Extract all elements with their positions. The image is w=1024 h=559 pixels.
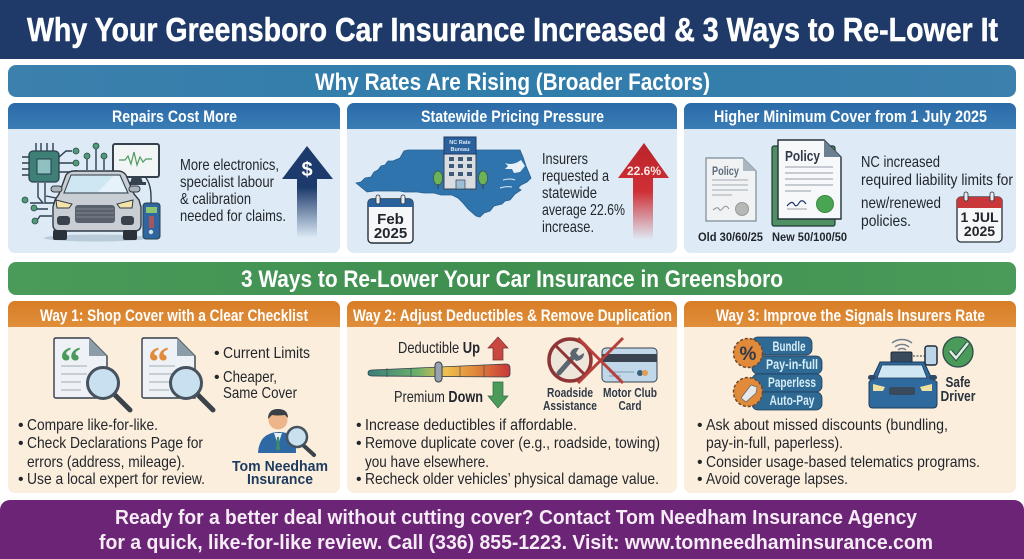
text: repairs: specialist labour: [180, 174, 275, 191]
icon: diagnostic monitor: [113, 144, 159, 185]
text: way 2 bullets: [356, 417, 660, 488]
icon: rate bureau building: Bureau: [451, 147, 469, 153]
icon: safe driver check: [943, 337, 973, 367]
text: way 2 bullets: Recheck older vehicles’ physical damage value.: [365, 471, 659, 488]
text: liability limits: [861, 154, 1014, 230]
icon: discount pills: Bundle: [772, 339, 806, 354]
icon: NC map: [356, 150, 531, 217]
icon: green down arrow: [488, 382, 508, 408]
icon: dollar up arrow: $: [301, 159, 313, 181]
panel: statewide pricing pressure: Statewide Pricing Pressure: [421, 107, 604, 126]
text: statewide: statewide: [542, 185, 597, 202]
text: way 1 bullets: Use a local expert for review.: [27, 471, 205, 488]
text: statewide: requested a: [542, 168, 609, 185]
panel: repairs cost more: Repairs Cost More: [112, 107, 237, 126]
panel: repairs cost more: [8, 103, 340, 253]
text: way 3 bullets: [697, 417, 980, 488]
text: way 1 bullets: •: [18, 471, 24, 488]
text: way 2 bullets: •: [356, 417, 362, 434]
section banner: why rates are rising: [8, 65, 1016, 97]
text: repairs: [180, 157, 286, 225]
label: new limits: New 50/100/50: [772, 230, 847, 244]
panel: statewide pricing pressure: [347, 103, 677, 253]
icon: discount pills: Auto-Pay: [770, 393, 815, 408]
text: checklist items: •: [214, 345, 220, 362]
text: way 3 bullets: •: [697, 471, 703, 488]
section banner: why rates are rising: Why Rates Are Rising (Broader Factors): [315, 69, 710, 96]
text: statewide: increase.: [542, 219, 594, 236]
slider: deductible: [368, 362, 510, 382]
label: roadside assistance: Assistance: [543, 398, 597, 413]
label: Tom Needham Insurance: Insurance: [247, 472, 313, 488]
text: checklist items: [214, 345, 310, 402]
panel: way 2: Way 2: Adjust Deductibles & Remove Duplication: [353, 306, 672, 325]
section banner: three ways: [8, 262, 1016, 295]
icon: dollar up arrow: [282, 146, 333, 238]
text: way 3 bullets: Consider usage-based telematics programs.: [706, 454, 980, 471]
icon: telematics car: [868, 339, 937, 408]
call to action banner: for a quick, like-for-like review. Call (336) 855-1223. Visit: www.tomneedhaminsurance.com: [99, 531, 933, 554]
text: repairs: needed for claims.: [180, 208, 286, 225]
text: way 1 bullets: Check Declarations Page for: [27, 435, 204, 452]
section banner: three ways: 3 Ways to Re-Lower Your Car Insurance in Greensboro: [241, 266, 783, 293]
icon: circuit chip: [22, 143, 107, 224]
panel: higher minimum cover: [684, 103, 1016, 253]
text: way 2 bullets: you have elsewhere.: [365, 454, 489, 471]
icon: roadside assistance crossed out: [549, 339, 591, 381]
label: premium down: Premium Down: [394, 389, 483, 406]
label: safe driver: Safe: [946, 374, 970, 391]
text: way 1 bullets: •: [18, 417, 24, 434]
icon: Feb 2025 calendar: [368, 195, 413, 243]
panel: way 1: [8, 301, 340, 493]
label: Tom Needham Insurance: Tom Needham: [232, 459, 328, 475]
label: safe driver: Driver: [940, 388, 976, 405]
panel: way 3: [684, 301, 1016, 493]
text: checklist items: Same Cover: [223, 385, 298, 402]
text: statewide: Insurers: [542, 151, 588, 168]
text: way 3 bullets: Ask about missed discounts (bundling,: [706, 417, 948, 434]
call to action banner: Ready for a better deal without cutting cover? Contact Tom Needham Insurance Agency: [115, 506, 918, 529]
text: checklist items: Cheaper,: [223, 369, 277, 386]
text: repairs: More electronics,: [180, 157, 279, 174]
icon: 22.6% red up arrow: 22.6%: [627, 164, 661, 178]
label: Tom Needham Insurance: [232, 459, 328, 488]
text: way 1 bullets: errors (address, mileage).: [27, 454, 185, 471]
icon: Feb 2025 calendar: 2025: [374, 225, 407, 242]
text: liability limits: NC increased: [861, 154, 940, 171]
text: way 1 bullets: [18, 417, 205, 488]
icon: document with magnifier, orange: “: [148, 340, 169, 386]
icon: new policy: Policy: [785, 148, 821, 165]
text: liability limits: policies.: [861, 213, 911, 230]
panel: way 2: [347, 301, 677, 493]
icon: red up arrow: [488, 337, 508, 360]
label: motor club card: Motor Club: [603, 385, 657, 400]
icon: car front: [44, 171, 148, 242]
icon: old policy: Policy: [712, 166, 739, 178]
icon: rate bureau building: NC Rate: [449, 140, 471, 146]
icon: motor club card crossed out: [578, 338, 657, 383]
text: way 3 bullets: •: [697, 417, 703, 434]
text: way 3 bullets: pay-in-full, paperless).: [706, 435, 843, 452]
text: checklist items: •: [214, 369, 220, 386]
icon: document with magnifier, green: [54, 338, 130, 410]
text: way 3 bullets: •: [697, 454, 703, 471]
icon: 1 July 2025 calendar: 2025: [964, 223, 995, 239]
text: checklist items: Current Limits: [223, 345, 310, 362]
icon: 22.6% red up arrow: [618, 143, 669, 240]
label: roadside assistance: Roadside: [547, 385, 593, 400]
text: way 3 bullets: Avoid coverage lapses.: [706, 471, 848, 488]
label: motor club card: [603, 385, 657, 413]
label: motor club card: Card: [618, 398, 642, 413]
label: old limits: Old 30/60/25: [698, 230, 763, 244]
label: roadside assistance: [543, 385, 597, 413]
label: safe driver: [940, 374, 976, 405]
text: repairs: & calibration: [180, 191, 251, 208]
icon: discount pills: [734, 337, 822, 410]
icon: document with magnifier, green: “: [60, 340, 81, 386]
icon: discount pills: Paperless: [768, 375, 816, 390]
icon: rate bureau building: [434, 137, 488, 189]
call to action banner: [0, 500, 1024, 559]
text: statewide: [542, 151, 625, 236]
icon: new policy: [772, 140, 841, 226]
text: way 2 bullets: •: [356, 471, 362, 488]
icon: OBD scanner: [143, 178, 160, 239]
label: deductible up: Deductible Up: [398, 340, 480, 357]
icon: Feb 2025 calendar: Feb: [377, 211, 404, 228]
text: statewide: average 22.6%: [542, 202, 625, 219]
text: liability limits: new/renewed: [861, 195, 941, 212]
title banner: [0, 0, 1024, 59]
text: way 1 bullets: Compare like-for-like.: [27, 417, 158, 434]
text: way 2 bullets: •: [356, 435, 362, 452]
icon: 1 July 2025 calendar: [957, 192, 1002, 242]
panel: way 1: Way 1: Shop Cover with a Clear Checklist: [40, 306, 308, 325]
icon: 1 July 2025 calendar: 1 JUL: [960, 209, 999, 225]
text: way 2 bullets: Remove duplicate cover (e.g., roadside, towing): [365, 435, 660, 452]
icon: discount pills: Pay-in-full: [766, 357, 818, 372]
icon: document with magnifier, orange: [142, 338, 213, 410]
icon: agent with magnifier: [258, 409, 314, 455]
icon: old policy: [706, 158, 756, 221]
text: way 1 bullets: •: [18, 435, 24, 452]
icon: discount pills: %: [740, 344, 757, 365]
text: way 2 bullets: Increase deductibles if affordable.: [365, 417, 577, 434]
